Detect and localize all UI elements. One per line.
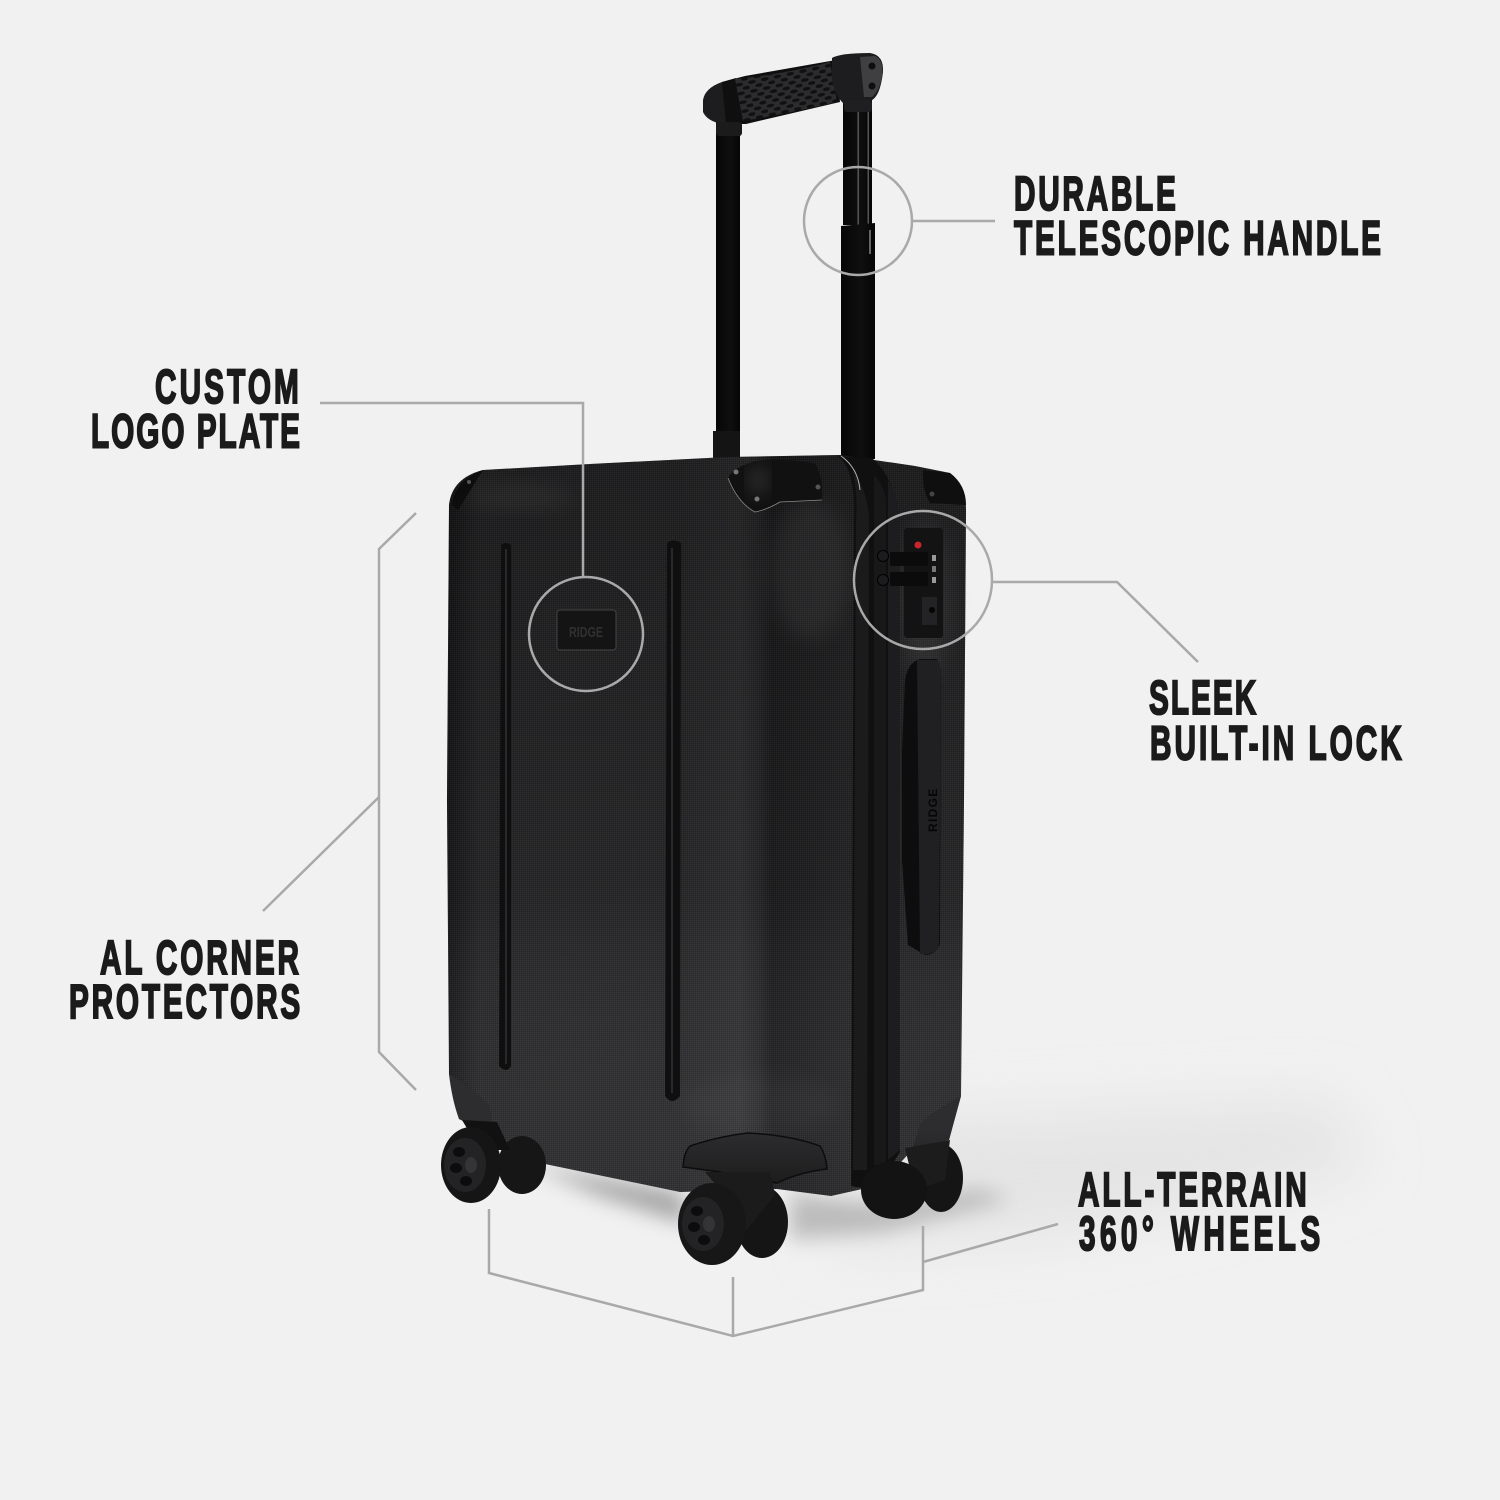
label: sleek built-in lock — [1149, 672, 1402, 770]
rear left wheel — [441, 1120, 546, 1203]
suitcase — [441, 53, 966, 1265]
lock — [878, 528, 943, 638]
label: custom logo plate: LOGO PLATE — [91, 405, 300, 458]
label: durable telescopic handle: TELESCOPIC HANDLE — [1014, 212, 1381, 265]
label: al corner protectors: PROTECTORS — [69, 976, 300, 1029]
label: al corner protectors — [69, 932, 300, 1029]
floor shadow — [530, 1100, 1370, 1250]
wheel bumpers — [449, 1074, 961, 1183]
label: durable telescopic handle: DURABLE — [1014, 168, 1176, 221]
label: all-terrain 360 wheels: 360° WHEELS — [1079, 1208, 1320, 1261]
label: custom logo plate — [91, 361, 300, 458]
callout: lock — [854, 511, 1198, 662]
callout lines — [263, 167, 1198, 1336]
label: custom logo plate: CUSTOM — [155, 361, 299, 414]
suitcase body — [447, 455, 966, 1196]
label: sleek built-in lock: BUILT-IN LOCK — [1150, 717, 1402, 770]
right wheels — [861, 1140, 963, 1219]
label: durable telescopic handle — [1014, 168, 1381, 265]
side carry handle: RIDGE — [926, 787, 940, 832]
front centre wheel — [678, 1172, 788, 1265]
telescopic handle — [703, 53, 883, 461]
label: all-terrain 360 wheels: ALL-TERRAIN — [1078, 1164, 1307, 1217]
side carry handle — [902, 659, 941, 955]
zipper band — [838, 456, 900, 1188]
callout: corner protectors bracket — [263, 513, 416, 1090]
grooves — [499, 540, 681, 1101]
handle grip — [703, 53, 883, 136]
callout: logo plate — [320, 403, 643, 691]
callout: wheels bracket — [489, 1209, 1058, 1336]
handle poles — [713, 95, 875, 461]
label: al corner protectors: AL CORNER — [100, 932, 299, 985]
corner protectors — [452, 460, 966, 512]
label: sleek built-in lock: SLEEK — [1149, 672, 1256, 725]
callout: telescopic handle — [804, 167, 995, 275]
wheels — [441, 1120, 963, 1265]
logo plate — [557, 610, 616, 650]
logo plate: RIDGE — [569, 624, 603, 641]
label: all-terrain 360 wheels — [1078, 1164, 1320, 1261]
